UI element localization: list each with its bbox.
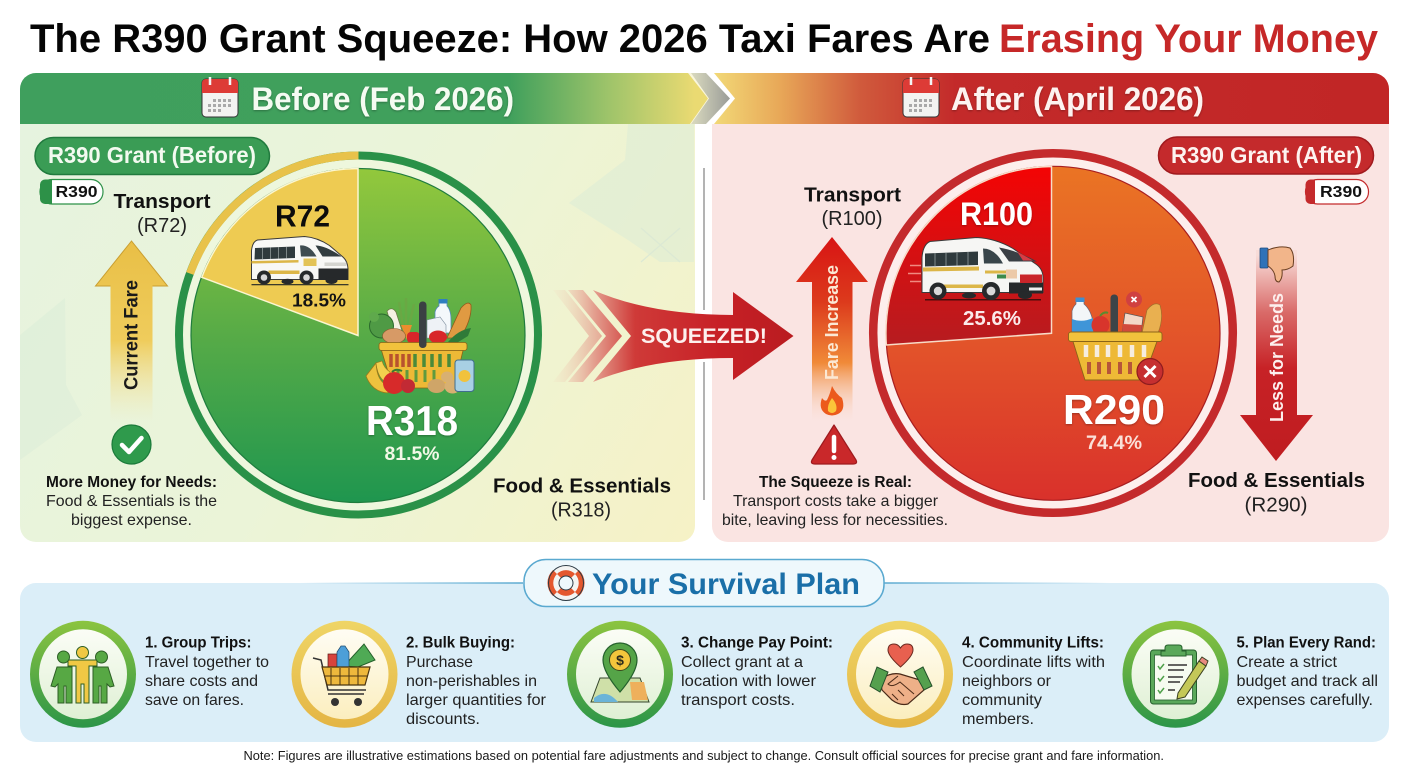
arrow: squeezed: [553, 290, 794, 382]
text: plan every rand: [1236, 634, 1378, 709]
header text: after: After (April 2026): [951, 81, 1204, 117]
icon: cart: [292, 621, 398, 728]
text: change pay point: 3. Change Pay Point:: [681, 634, 833, 652]
header: after: [714, 73, 1389, 124]
value: R318: R318: [366, 397, 458, 444]
label: transport before: (R72): [137, 215, 187, 237]
icon: handshake: [847, 621, 953, 728]
icon: lifebuoy: [547, 566, 585, 600]
text: plan every rand: expenses carefully.: [1236, 692, 1373, 709]
header text: before: Before (Feb 2026): [252, 81, 514, 117]
callout: more money: [46, 474, 217, 529]
callout: more money: biggest expense.: [71, 512, 192, 529]
label: transport after: (R100): [822, 208, 882, 230]
value: R100: R100: [960, 196, 1033, 232]
arrow: less for needs: [1240, 250, 1313, 461]
icon: thumbs down: [1260, 247, 1294, 282]
icon: warning: [811, 425, 857, 464]
pie chart: before: [175, 152, 542, 518]
arrow: current fare: [96, 241, 168, 422]
text: bulk buying: non-perishables in: [406, 673, 537, 690]
label: transport before: [114, 191, 211, 237]
text: community lifts: 4. Community Lifts:: [962, 634, 1104, 652]
icon: group: [30, 621, 136, 728]
panel: before: [20, 73, 727, 542]
callout: squeeze is real: The Squeeze is Real:: [759, 474, 912, 491]
text: change pay point: location with lower: [681, 673, 817, 690]
icon: map pin: [567, 621, 673, 728]
tip 4: community lifts: [847, 621, 1105, 728]
badge: R390 before: [40, 180, 103, 204]
label: food before: Food & Essentials: [493, 476, 671, 498]
text: group trips: [145, 634, 269, 709]
text: community lifts: community: [962, 692, 1042, 709]
icon: check: [112, 425, 151, 464]
text: change pay point: [681, 634, 833, 709]
text: community lifts: neighbors or: [962, 673, 1052, 690]
slice: transport: [886, 166, 1052, 345]
callout: squeeze is real: bite, leaving less for necessities.: [722, 512, 948, 529]
text: community lifts: members.: [962, 711, 1034, 728]
tip 5: plan every rand: [1122, 621, 1378, 728]
value: R290: R290: [1063, 386, 1165, 433]
callout: squeeze is real: [722, 474, 948, 529]
label: food after: Food & Essentials: [1188, 470, 1365, 492]
label: food after: [1188, 470, 1365, 516]
value: R72: R72: [275, 198, 330, 234]
percent: 18.5: 18.5%: [292, 290, 346, 310]
footnote: Note: Figures are illustrative estimations based on potential fare adjustments and subject to change. Consult official sources for precise grant and fare information.: [244, 749, 1164, 763]
callout: more money: Food & Essentials is the: [46, 493, 217, 510]
pie chart: after: [869, 149, 1237, 517]
icon: taxi after: [908, 238, 1043, 300]
text: bulk buying: [406, 634, 547, 728]
title: The R390 Grant Squeeze: How 2026 Taxi Fares Are: [30, 17, 990, 61]
tip 2: bulk buying: [292, 621, 547, 728]
panel: survival plan: [20, 560, 1389, 742]
text: plan every rand: 5. Plan Every Rand:: [1236, 634, 1376, 652]
arrow: squeezed: SQUEEZED!: [641, 325, 767, 348]
text: bulk buying: Purchase: [406, 654, 473, 671]
grant pill: after: R390 Grant (After): [1171, 142, 1362, 168]
icon: map pin: $: [616, 652, 624, 668]
percent: 81.5: 81.5%: [384, 444, 440, 465]
label: transport after: Transport: [804, 184, 901, 206]
badge: R390 after: R390: [1320, 184, 1362, 201]
text: community lifts: [962, 634, 1105, 728]
text: plan every rand: Create a strict: [1236, 654, 1338, 671]
grant pill: after: [1158, 137, 1374, 174]
grant pill: before: R390 Grant (Before): [48, 142, 256, 168]
text: group trips: Travel together to: [145, 654, 269, 671]
text: group trips: 1. Group Trips:: [145, 634, 252, 652]
text: community lifts: Coordinate lifts with: [962, 654, 1105, 671]
title: Erasing Your Money: [999, 17, 1379, 61]
grant pill: before: [35, 138, 270, 174]
chevron between headers: [688, 73, 734, 124]
heading: survival plan: Your Survival Plan: [592, 568, 860, 601]
badge: R390 after: [1306, 180, 1368, 204]
slice: transport: [202, 168, 358, 336]
label: transport before: Transport: [114, 191, 211, 213]
label: food before: [493, 476, 671, 522]
percent: 25.6: 25.6%: [963, 308, 1021, 330]
arrow: current fare: Current Fare: [122, 280, 142, 390]
text: change pay point: transport costs.: [681, 692, 795, 709]
text: plan every rand: budget and track all: [1236, 673, 1378, 690]
icon: reduced basket: [1068, 292, 1163, 384]
label: food after: (R290): [1244, 494, 1308, 516]
icon: taxi before: [252, 236, 348, 285]
icon: food basket: [366, 298, 474, 394]
percent: 74.4: 74.4%: [1086, 433, 1142, 454]
panel: after: [712, 73, 1389, 542]
icon: calendar after: [903, 77, 939, 117]
tip 1: group trips: [30, 621, 269, 728]
arrow: fare increase: [796, 237, 868, 422]
divider line: [703, 168, 705, 500]
text: bulk buying: discounts.: [406, 711, 480, 728]
badge: R390 before: R390: [56, 184, 98, 201]
label: transport after: [804, 184, 901, 230]
label: food before: (R318): [551, 500, 611, 522]
callout: squeeze is real: Transport costs take a bigger: [733, 493, 939, 510]
text: bulk buying: larger quantities for: [406, 692, 547, 709]
icon: clipboard: [1122, 621, 1228, 728]
text: bulk buying: 2. Bulk Buying:: [406, 634, 515, 652]
icon: flame: [821, 386, 843, 416]
text: group trips: share costs and: [145, 673, 258, 690]
callout: more money: More Money for Needs:: [46, 474, 217, 491]
arrow: less for needs: Less for Needs: [1267, 293, 1287, 422]
icon: calendar before: [202, 77, 238, 117]
text: group trips: save on fares.: [145, 692, 244, 709]
heading: survival plan: [524, 560, 884, 606]
header: before: [20, 73, 727, 124]
tip 3: change pay point: [567, 621, 833, 728]
text: change pay point: Collect grant at a: [681, 654, 803, 671]
arrow: fare increase: Fare Increase: [822, 265, 842, 380]
